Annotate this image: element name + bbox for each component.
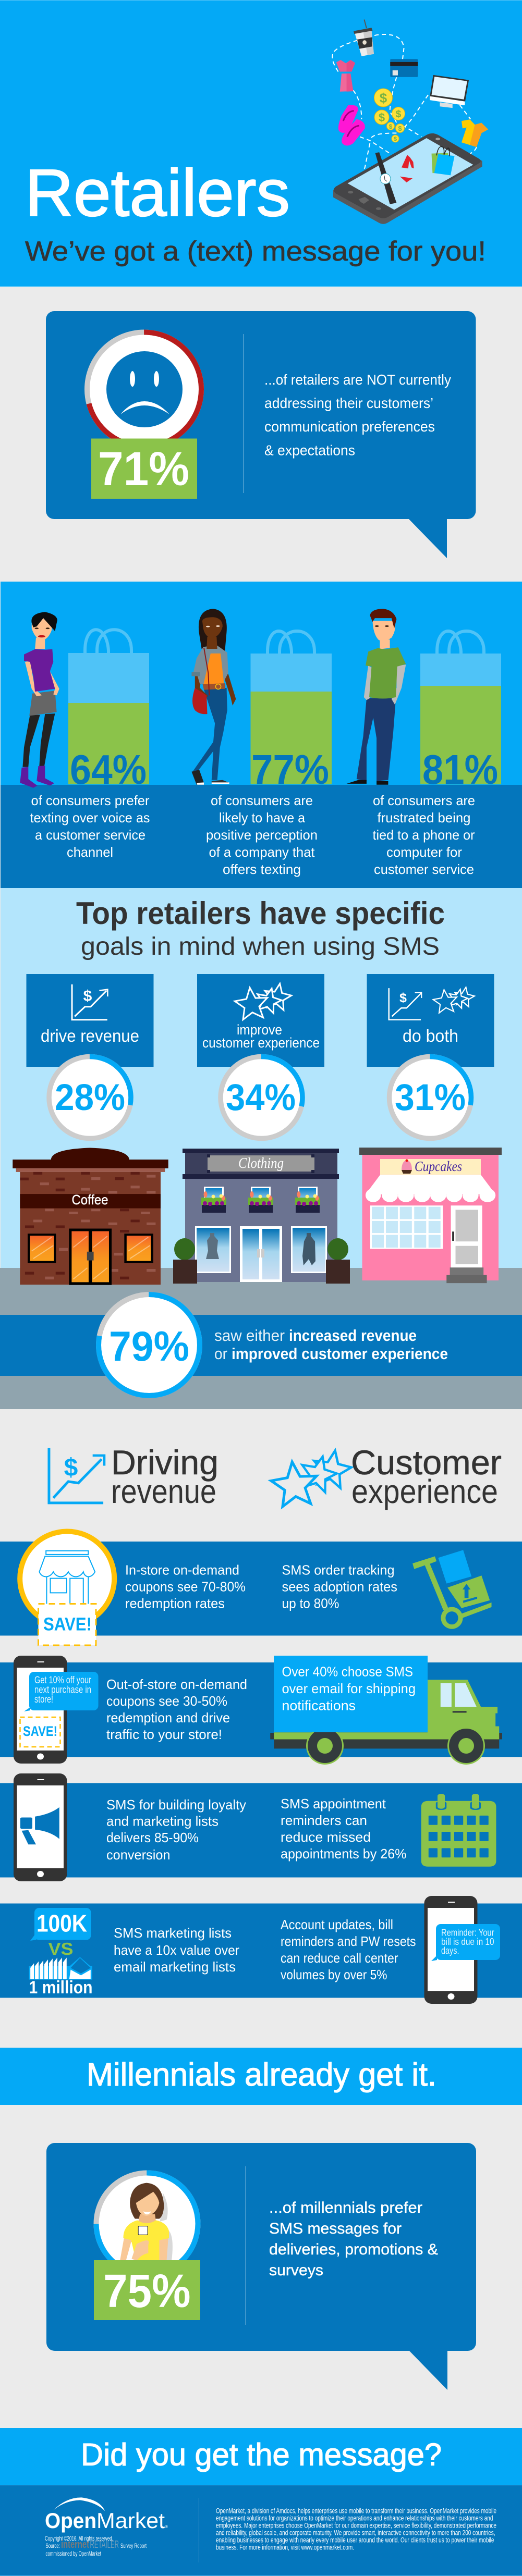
icon: credit card [390, 59, 418, 77]
bag chart: 64%: 64% [70, 746, 147, 793]
text: copyright and source: RETAILER [90, 2539, 119, 2550]
text: millennials statement [269, 2199, 438, 2279]
text: 81% caption [372, 793, 475, 877]
card: improve customer experience [197, 974, 324, 1067]
icon: phone with reminder: Reminder: Your [441, 1927, 494, 1938]
text: 77% caption: of a company that [209, 844, 315, 860]
title: Retailers [25, 156, 290, 230]
graphic: 100K vs 1 million: VS [48, 1939, 73, 1958]
icon: monitor [430, 75, 469, 108]
gauge: 75% with woman [96, 2173, 198, 2274]
text: 77% caption: likely to have a [219, 810, 306, 825]
subtitle: We’ve got a (text) message for you! [25, 236, 486, 267]
text: order tracking: sees adoption rates [282, 1579, 397, 1595]
graphic: 100K vs 1 million [29, 1908, 93, 1998]
icon: coins: $ [389, 123, 393, 130]
row: list value and account updates [0, 1896, 522, 2004]
text: list value [114, 1925, 239, 1975]
text: retailers statement: addressing their customers’ [264, 395, 433, 411]
text: appointments: reduce missed [281, 1829, 371, 1845]
gauge: 79% [99, 1295, 200, 1396]
awning [366, 1175, 495, 1202]
text: 64% caption [30, 793, 150, 860]
text: copyright and source: Copyright ©2016. All rights reserved. [45, 2536, 113, 2542]
icon: revenue chart small [389, 988, 421, 1020]
icon: phone with coupon: Get 10% off your [34, 1675, 92, 1686]
icon: delivery truck [270, 1680, 502, 1765]
text: retailers statement [264, 372, 451, 459]
text: loyalty: delivers 85-90% [106, 1830, 199, 1845]
icon: bikini [400, 155, 414, 182]
stat: 75%: 75% [103, 2265, 191, 2318]
icon: watch [375, 152, 396, 204]
icon: phone with coupon [14, 1656, 98, 1764]
text: appointments [281, 1796, 407, 1862]
text: 81% caption: tied to a phone or [372, 827, 475, 843]
card: do both: $ [399, 991, 407, 1005]
figure: woman with red bag [191, 609, 236, 785]
row: coupons and order tracking [0, 1531, 522, 1645]
row: out-of-store coupons and shipping [0, 1656, 522, 1765]
text: 77% caption: offers texting [223, 861, 301, 877]
heading: customer experience: experience [351, 1473, 498, 1510]
card: drive revenue: drive revenue [41, 1026, 139, 1045]
text: list value: have a 10x value over [114, 1942, 239, 1958]
text: loyalty: SMS for building loyalty [106, 1797, 246, 1813]
logo: OpenMarket: Open [45, 2508, 96, 2533]
dashed route lines [332, 34, 477, 205]
heading [76, 896, 445, 960]
text: 77% caption: of consumers are [211, 793, 313, 808]
icon: hand truck [412, 1550, 492, 1629]
panel: driving revenue and customer experience [0, 1443, 522, 2004]
text: about OpenMarket: business. For more information, visit www.openmarket.com. [216, 2543, 354, 2552]
heading: driving revenue: $ [64, 1454, 78, 1482]
bag chart: 64% [68, 630, 149, 793]
text: about OpenMarket [216, 2507, 496, 2552]
text: out-of-store coupons [106, 1677, 247, 1742]
icon: store badge: SAVE! [43, 1614, 92, 1634]
callout: shipping notifications: notifications [282, 1698, 356, 1714]
icon: dress [336, 60, 355, 92]
text: millennials statement: deliveries, promotions & [269, 2241, 438, 2258]
gauge: 79%: 79% [109, 1323, 189, 1370]
text: account updates: can reduce call center [281, 1950, 398, 1966]
panel: 75% millennials speech bubble [46, 2143, 476, 2390]
graphic: 100K vs 1 million: 1 million [29, 1978, 93, 1998]
text: millennials statement: surveys [269, 2262, 323, 2279]
icon: phone with reminder: days. [441, 1945, 459, 1956]
stat: 71%: 71% [98, 442, 189, 496]
icon: stars small [432, 985, 476, 1014]
text: copyright and source: Source: [46, 2543, 60, 2549]
heading: driving revenue: revenue [111, 1473, 216, 1510]
icon: envelopes [29, 1957, 92, 1980]
window [370, 1205, 443, 1249]
gauge: 34% [221, 1057, 302, 1138]
figure: smiling woman with phone [120, 2183, 173, 2261]
text: loyalty: conversion [106, 1847, 170, 1863]
building: clothing store: Clothing [238, 1155, 284, 1172]
text: 77% caption [206, 793, 318, 877]
text: order tracking [282, 1562, 397, 1611]
text: 81% caption: of consumers are [373, 793, 475, 808]
upper windows with flower boxes [201, 1187, 320, 1213]
banner: millennials heading: Millennials already get it. [87, 2057, 436, 2093]
text: out-of-store coupons: Out-of-store on-demand [106, 1677, 247, 1692]
text: list value: email marketing lists [114, 1959, 236, 1975]
text: account updates [281, 1917, 416, 1982]
icon: cupcake [402, 1159, 412, 1174]
logo: OpenMarket: Market [96, 2508, 165, 2533]
text: retailers statement: & expectations [264, 442, 355, 459]
text: copyright and source: commissioned by OpenMarket [46, 2551, 102, 2557]
text: list value: SMS marketing lists [114, 1925, 232, 1941]
text: 79% statement [214, 1326, 448, 1363]
gauge: 31% [389, 1057, 471, 1138]
callout: shipping notifications: Over 40% choose SMS [282, 1663, 413, 1679]
text: copyright and source: internet [61, 2539, 89, 2550]
text: out-of-store coupons: traffic to your store! [106, 1727, 222, 1742]
text: retailers statement: ...of retailers are NOT currently [264, 372, 451, 388]
building: clothing store [173, 1149, 350, 1284]
icon: coins: $ [398, 125, 402, 132]
logo: OpenMarket: ® [165, 2524, 168, 2529]
icon: stars [234, 981, 293, 1020]
lower windows and door [195, 1226, 327, 1282]
row: loyalty and appointments [0, 1773, 522, 1881]
gauge: 28%: 28% [55, 1077, 125, 1118]
text: 64% caption: a customer service [35, 827, 145, 843]
icon: flip-flops [338, 105, 365, 145]
icon: revenue chart [72, 984, 107, 1020]
icon: store badge [20, 1531, 114, 1645]
gauge: 34%: 34% [226, 1077, 296, 1118]
icon: phone with coupon: SAVE! [23, 1723, 57, 1739]
banner: did you get the message: Did you get the message? [81, 2437, 442, 2472]
text: in-store coupons: coupons see 70-80% [125, 1579, 246, 1595]
icon: phone with reminder [424, 1896, 500, 2004]
text: loyalty: and marketing lists [106, 1814, 218, 1829]
bag chart: 77% [250, 631, 332, 793]
text: 64% caption: of consumers prefer [31, 793, 150, 808]
text: out-of-store coupons: redemption and drive [106, 1710, 230, 1725]
icon: phone with reminder: bill is due in 10 [441, 1937, 494, 1947]
bag chart: 81% [420, 631, 501, 793]
heading: goals in mind when using SMS [81, 933, 440, 960]
heading: Top retailers have specific [76, 896, 445, 931]
icon: coins: $ [380, 90, 387, 106]
icon: phone with coupon: next purchase in [34, 1684, 91, 1696]
text: 81% caption: computer for [386, 844, 462, 860]
illustration: phone with shopping icons [332, 20, 488, 224]
text: appointments: appointments by 26% [281, 1846, 407, 1862]
text: appointments: SMS appointment [281, 1796, 386, 1811]
gauge: 31%: 31% [395, 1077, 466, 1118]
text: account updates: Account updates, bill [281, 1917, 393, 1932]
building: cupcake shop: Cupcakes [415, 1158, 462, 1174]
text: account updates: volumes by over 5% [281, 1967, 387, 1982]
banner: 79% [0, 1295, 522, 1396]
icon: coins: $ [379, 111, 385, 124]
heading: driving revenue: Driving [111, 1443, 218, 1482]
text: millennials statement: ...of millennials prefer [269, 2199, 422, 2216]
text: 79% statement: increased revenue [289, 1326, 417, 1345]
icon: t-shirt [462, 119, 488, 147]
text: 79% statement: saw either [214, 1326, 285, 1345]
icon: smartphone [333, 133, 482, 224]
building: coffee shop [13, 1148, 168, 1285]
heading: driving revenue [49, 1443, 218, 1510]
icon: coins: $ [394, 136, 397, 142]
text: order tracking: up to 80% [282, 1596, 339, 1611]
figure: woman in purple top [20, 612, 59, 788]
panel: footer [0, 2485, 522, 2576]
heading: customer experience: Customer [351, 1443, 502, 1482]
building: cupcake shop [359, 1148, 502, 1283]
heading: customer experience [270, 1443, 502, 1510]
text: copyright and source: Survey Report [120, 2543, 147, 2549]
planters [173, 1238, 350, 1284]
card: improve customer experience: customer experience [202, 1035, 320, 1051]
text: copyright and source [45, 2536, 147, 2557]
icon: coins: $ [396, 109, 402, 120]
gauge: 28% [49, 1057, 131, 1138]
figure: man in green shirt [347, 609, 406, 785]
icon: phone with coupon: store! [34, 1694, 53, 1705]
icon: shopping bag [432, 146, 455, 175]
text: out-of-store coupons: coupons see 30-50% [106, 1693, 227, 1709]
text: in-store coupons [125, 1562, 246, 1611]
text: appointments: reminders can [281, 1813, 367, 1828]
building: coffee shop: Coffee [72, 1192, 108, 1207]
text: in-store coupons: In-store on-demand [125, 1562, 239, 1578]
logo: OpenMarket [45, 2497, 168, 2533]
text: 81% caption: customer service [374, 861, 474, 877]
text: 77% caption: positive perception [206, 827, 318, 843]
panel: goals section [0, 888, 522, 1409]
text: order tracking: SMS order tracking [282, 1562, 394, 1578]
text: 79% statement: or [214, 1345, 227, 1363]
banner: millennials heading [0, 2048, 522, 2105]
text: 64% caption: texting over voice as [30, 810, 150, 825]
bag chart: 77%: 77% [251, 746, 329, 793]
text: 81% caption: frustrated being [378, 810, 470, 825]
icon: sad face gauge [87, 332, 201, 446]
card: improve customer experience: improve [237, 1022, 282, 1038]
panel: 71% retailers speech bubble [46, 311, 476, 558]
panel: header [0, 0, 522, 287]
card: do both: do both [403, 1026, 458, 1045]
icon: coffee cup [354, 20, 374, 56]
icon: calendar [421, 1794, 496, 1867]
card: do both [367, 974, 494, 1067]
text: 64% caption: channel [67, 844, 113, 860]
card: drive revenue: $ [83, 988, 92, 1005]
callout: shipping notifications: over email for shipping [282, 1681, 416, 1696]
text: in-store coupons: redemption rates [125, 1596, 225, 1611]
card: drive revenue [26, 974, 153, 1067]
text: 79% statement: improved customer experience [232, 1345, 448, 1363]
callout: shipping notifications [274, 1656, 428, 1732]
icon: phone with megaphone [14, 1773, 67, 1881]
banner: did you get the message [0, 2428, 522, 2485]
text: millennials statement: SMS messages for [269, 2220, 402, 2237]
door and steps [446, 1205, 487, 1283]
graphic: 100K vs 1 million: 100K [37, 1909, 87, 1937]
panel: consumers section [1, 582, 522, 888]
text: account updates: reminders and PW resets [281, 1933, 416, 1949]
bag chart: 81%: 81% [422, 746, 498, 793]
text: retailers statement: communication preferences [264, 418, 435, 435]
icon: coins [374, 89, 405, 142]
text: loyalty [106, 1797, 246, 1863]
